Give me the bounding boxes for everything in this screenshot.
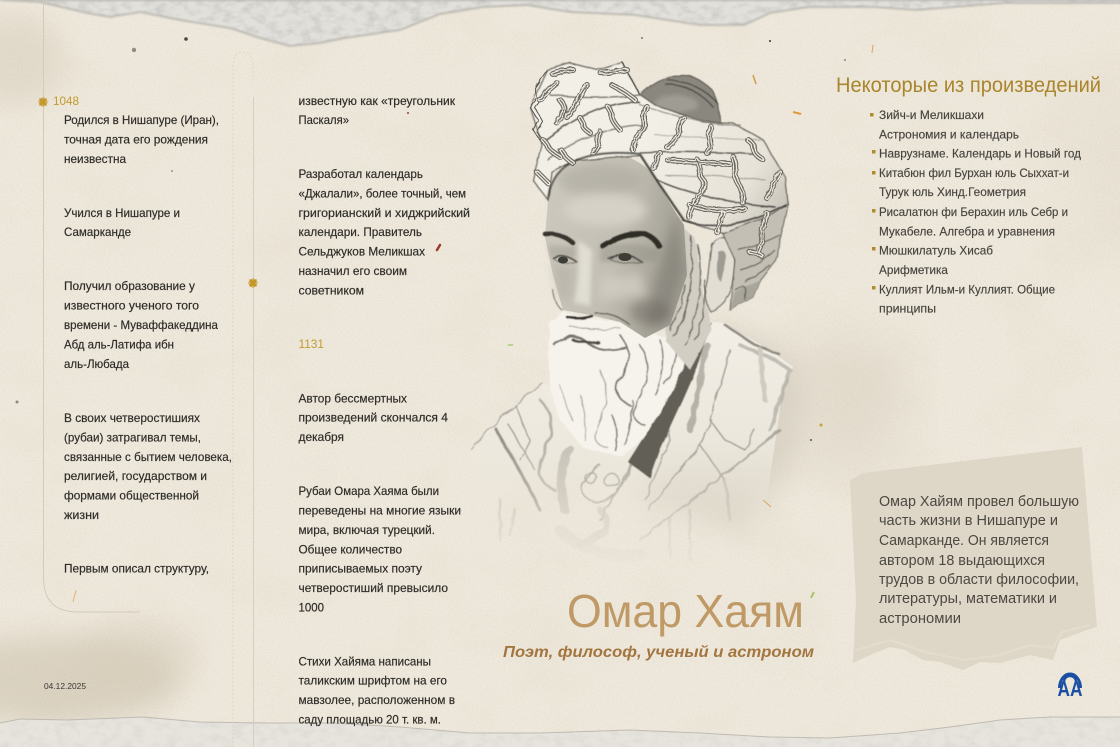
icon: AA logo: AA [1058, 678, 1082, 701]
work: Mushkilat: Арифметика [879, 263, 948, 277]
entry: death: Автор бессмертных [298, 392, 407, 406]
entry: death: произведений скончался 4 [298, 410, 448, 424]
paper specks [16, 37, 873, 602]
eyes [558, 253, 632, 264]
entry: birth: неизвестна [64, 152, 126, 166]
entry: mausoleum [298, 654, 455, 726]
entry: rubai: религией, государством и [64, 469, 207, 483]
entry: birth: Родился в Нишапуре (Иран), [64, 113, 219, 127]
work: Kulliyat: принципы [879, 302, 936, 316]
hair strands [670, 235, 706, 345]
turban main band [530, 62, 788, 233]
work: Zij: Зийч-и Меликшахи [879, 108, 984, 122]
face shading [548, 164, 684, 328]
work: Kulliyat: Куллият Ильм-и Куллият. Общие [879, 282, 1055, 296]
entry: triangle end: Паскаля» [298, 113, 349, 127]
work: Risala: Рисалатюн фи Берахин иль Себр и [879, 205, 1068, 219]
works heading: Некоторые из произведений [836, 74, 1101, 97]
entry: rubai: жизни [64, 508, 99, 522]
entry: education: времени - Муваффакеддина [64, 318, 218, 332]
entry: education: Получил образование у [64, 279, 195, 293]
entry: education: аль-Любада [64, 357, 129, 371]
entry: calendar: календари. Правитель [298, 225, 422, 239]
work: Kulliyat [879, 282, 1055, 316]
work: Kitab: Турук юль Хинд.Геометрия [879, 185, 1026, 199]
entry: triangle end: известную как «треугольник [298, 94, 456, 108]
entry: studies: Самарканде [64, 225, 131, 239]
entry: rubai: формами общественной [64, 488, 199, 502]
entry: rubai: В своих четверостишиях [64, 411, 200, 425]
beard [548, 312, 700, 457]
turban wavy left edge [530, 62, 640, 145]
note text: трудов в области философии, [879, 571, 1079, 588]
turban fold lines [542, 95, 785, 225]
entry: translations: Рубаи Омара Хаяма были [298, 484, 439, 498]
entry: rubai: связанные с бытием человека, [64, 450, 232, 464]
works list [870, 108, 1081, 316]
subtitle: Поэт, философ, ученый и астроном [503, 644, 814, 661]
entry: education: Абд аль-Латифа ибн [64, 338, 174, 352]
entry: calendar: григорианский и хиджрийский [298, 206, 470, 220]
robe [470, 322, 793, 548]
entry: calendar: Разработал календарь [298, 167, 423, 181]
dark shadow beside beard [628, 322, 712, 478]
turban body [530, 62, 788, 310]
work: Mushkilat: Мюшкилатуль Хисаб [879, 244, 993, 258]
year 1048: 1048 [53, 94, 79, 108]
entry: translations: приписываемых поэту [298, 562, 422, 576]
entry: calendar: Сельджуков Меликшах [298, 244, 425, 258]
note text: Омар Хайям провел большую [879, 493, 1079, 510]
entry: translations: мира, включая турецкий. [298, 523, 435, 537]
item bullets [870, 113, 876, 290]
marker: 1048 [38, 97, 48, 107]
entry: triangle end [298, 94, 456, 127]
turban checked stripes [537, 70, 780, 256]
ear [706, 238, 735, 311]
date: 04.12.2025 [44, 682, 87, 691]
timeline rule: left column [44, 0, 140, 612]
note text: литературы, математики и [879, 590, 1057, 607]
turban cap [640, 75, 720, 122]
hair behind ear [665, 225, 712, 370]
column 1 timeline text [53, 94, 232, 576]
note text: часть жизни в Нишапуре и [879, 512, 1058, 529]
column 2 timeline text [298, 94, 470, 726]
work: Risala: Мукабеле. Алгебра и уравнения [879, 224, 1055, 238]
year 1131: 1131 [298, 337, 324, 351]
facial features [545, 234, 659, 325]
entry: studies: Учился в Нишапуре и [64, 206, 180, 220]
entry: death [298, 392, 448, 444]
dotted loop connector [233, 52, 253, 747]
entry: mausoleum: мавзолее, расположенном в [298, 693, 455, 707]
work: Kitab: Китабюн фил Бурхан юль Сыххат-и [879, 166, 1069, 180]
torn paper top [0, 0, 1120, 50]
entry: translations: переведены на многие языки [298, 504, 461, 518]
entry: translations: 1000 [298, 600, 324, 614]
timeline rule: middle column [252, 97, 254, 747]
entry: mausoleum: Стихи Хайяма написаны [298, 654, 431, 668]
hairline shadow [548, 153, 684, 220]
entry: calendar: назначил его своим [298, 264, 407, 278]
marker: 1131 [248, 278, 258, 288]
face [545, 156, 687, 338]
entry: calendar [298, 167, 470, 298]
entry: calendar: советником [298, 284, 364, 298]
note text: автором 18 выдающихся [879, 552, 1045, 569]
soft halo behind figure [640, 320, 805, 530]
work: Zij: Астрономия и календарь [879, 128, 1019, 142]
portrait of Omar Khayyam [472, 62, 805, 585]
title: Омар Хаям [567, 585, 804, 637]
entry: death: декабря [298, 430, 344, 444]
note text: Самарканде. Он является [879, 532, 1049, 549]
torn paper bottom [0, 715, 1120, 747]
work: Zij [879, 108, 1019, 142]
work: Kitab [879, 166, 1069, 199]
entry: birth [64, 113, 219, 166]
entry: translations [298, 484, 461, 614]
entry: education: известного ученого того [64, 298, 199, 312]
entry: translations: четверостиший превысило [298, 581, 448, 595]
turban back folds and nape roll [722, 203, 788, 310]
entry: mausoleum: таликским шрифтом на его [298, 674, 447, 688]
note text: астрономии [879, 610, 961, 627]
entry: calendar: «Джалали», более точный, чем [298, 186, 466, 200]
entry: mausoleum: саду площадью 20 т. кв. м. [298, 712, 441, 726]
entry: triangle start: Первым описал структуру, [64, 562, 209, 576]
torn note panel [850, 447, 1097, 670]
work: Mushkilat [879, 244, 993, 277]
entry: birth: точная дата его рождения [64, 132, 208, 146]
entry: rubai [64, 411, 232, 522]
entry: rubai: (рубаи) затрагивал темы, [64, 430, 201, 444]
note text [879, 493, 1079, 627]
work: Nowruznama: Наврузнаме. Календарь и Новый год [879, 146, 1081, 160]
entry: translations: Общее количество [298, 542, 402, 556]
entry: studies [64, 206, 180, 239]
entry: education [64, 279, 218, 371]
work: Risala [879, 205, 1068, 238]
